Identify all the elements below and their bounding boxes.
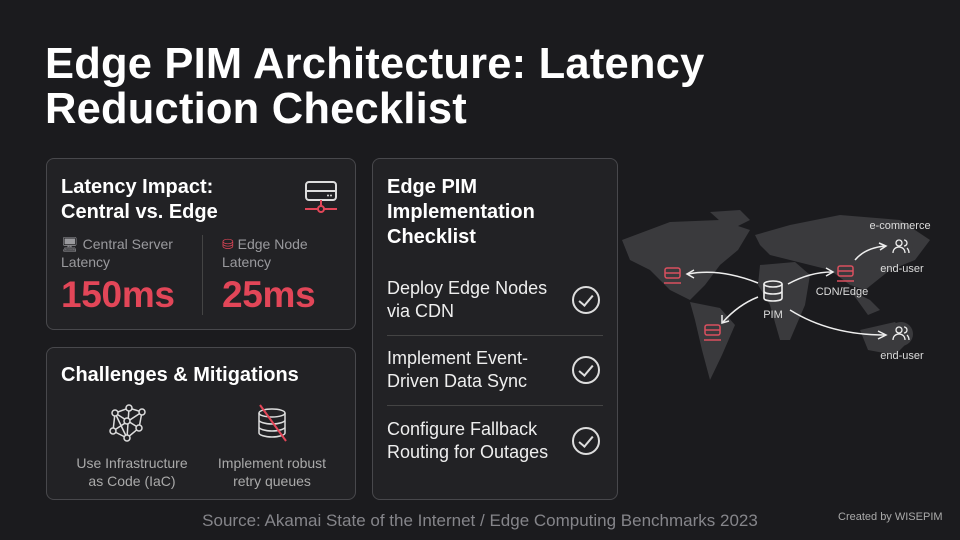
heading: checklist	[387, 176, 535, 248]
stat: central: 150ms	[61, 274, 175, 315]
arrow: to end-user 1	[855, 246, 885, 260]
world map diagram: end-user	[880, 350, 924, 362]
heading: latency impact: Latency Impact:	[61, 176, 213, 198]
text: IaC: Use Infrastructure	[76, 455, 188, 471]
stat: edge: 25ms	[222, 274, 315, 315]
item 1	[387, 278, 547, 321]
heading: checklist: Edge PIM	[387, 176, 477, 198]
panel: challenges	[46, 347, 356, 500]
icon: network	[109, 404, 146, 442]
world map diagram: end-user	[880, 263, 924, 275]
icon: server	[305, 181, 337, 213]
title	[45, 40, 704, 133]
world map diagram: PIM	[763, 309, 783, 321]
world map diagram: e-commerce	[869, 220, 931, 232]
item 1: via CDN	[387, 301, 454, 321]
arrow: to end-user 2	[790, 310, 885, 335]
text: IaC: as Code (IaC)	[88, 473, 176, 489]
panel: checklist	[372, 158, 618, 500]
icons: edge nodes	[664, 266, 854, 340]
item 3	[387, 419, 548, 462]
heading: challenges: Challenges & Mitigations	[61, 364, 299, 386]
title: Reduction Checklist	[45, 85, 467, 133]
text: retry	[218, 455, 326, 489]
stat: edge: Latency	[222, 254, 271, 270]
item 2: Driven Data Sync	[387, 371, 527, 391]
arrow: to CDN	[788, 272, 832, 284]
credit: Created by WISEPIM	[838, 511, 943, 523]
stat: central: 🖥 Central Server	[61, 236, 173, 252]
stat: edge	[222, 236, 315, 315]
icon: PIM database	[764, 281, 782, 301]
text: retry: Implement robust	[218, 455, 326, 471]
stat: central	[61, 236, 175, 315]
heading: checklist: Checklist	[387, 226, 476, 248]
heading: latency impact	[61, 176, 218, 223]
arrow: to west	[688, 272, 758, 283]
world map diagram: CDN/Edge	[816, 286, 868, 298]
source footer: Source: Akamai State of the Internet / Edge Computing Benchmarks 2023	[202, 511, 758, 530]
icons: end-users	[889, 235, 913, 259]
item 2	[387, 348, 528, 391]
panel: latency impact	[46, 158, 356, 330]
heading: checklist: Implementation	[387, 201, 535, 223]
item 2: Implement Event-	[387, 348, 528, 368]
item 3: Routing for Outages	[387, 442, 548, 462]
world map diagram	[622, 210, 931, 380]
stat: edge: ⛁ Edge Node	[222, 236, 308, 252]
text: retry: retry queues	[233, 473, 311, 489]
item 3: Configure Fallback	[387, 419, 537, 439]
arrow: to south	[723, 297, 758, 322]
heading: latency impact: Central vs. Edge	[61, 201, 218, 223]
icon: database crossed	[258, 404, 287, 442]
stat: central: Latency	[61, 254, 110, 270]
item 1: Deploy Edge Nodes	[387, 278, 547, 298]
title: Edge PIM Architecture: Latency	[45, 40, 704, 88]
text: IaC	[76, 455, 188, 489]
